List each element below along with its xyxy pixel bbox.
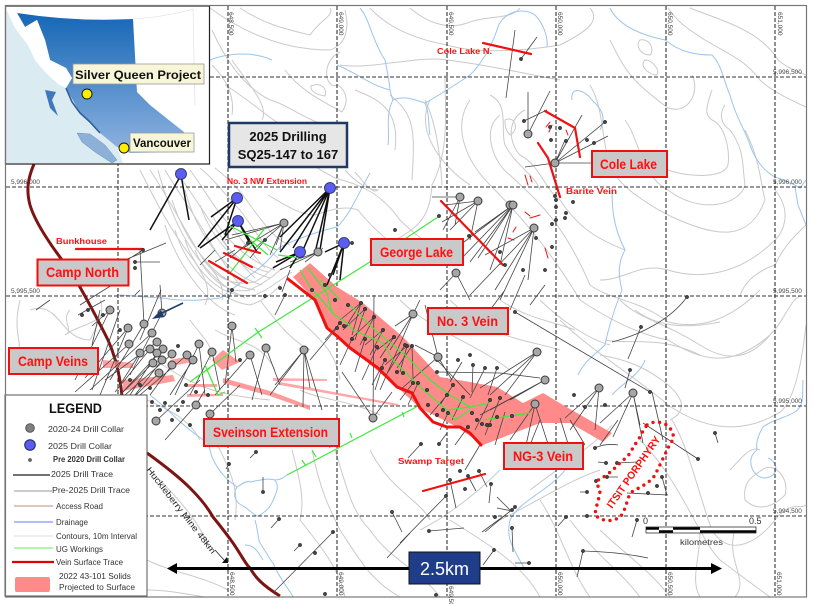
access road <box>28 164 280 596</box>
grid coordinate labels: 650,000 <box>556 572 563 596</box>
small red labels: Cole Lake N. <box>437 46 492 56</box>
label: george lake: George Lake <box>380 245 453 260</box>
scale bar: 0.5 <box>749 516 762 526</box>
small drill collars <box>80 57 717 597</box>
legend panel <box>5 395 147 596</box>
small red labels: Barite Vein <box>566 186 617 196</box>
label: no. 3 vein <box>428 308 508 334</box>
itsit porphyry outline <box>595 422 673 521</box>
huckleberry pointer <box>215 550 228 563</box>
label: ng-3 vein: NG-3 Vein <box>513 449 573 464</box>
inset label: silver queen project <box>73 64 204 84</box>
vein surface traces <box>76 43 580 491</box>
grid coordinate labels: 5,995,000 <box>773 398 802 405</box>
label: itsit porphyry: ITSIT PORPHYRY <box>605 434 663 511</box>
label: cole lake <box>592 151 667 177</box>
2.5km span arrow: 2.5km <box>420 559 469 579</box>
grid coordinate labels: 650,000 <box>556 12 563 36</box>
2025 drill collars <box>176 168 350 258</box>
grid coordinate labels: 651,000 <box>775 572 782 596</box>
grid coordinate labels: 650,500 <box>666 12 673 36</box>
2020-24 drill collars <box>106 130 637 425</box>
grid coordinate labels: 649,500 <box>447 12 454 36</box>
scale bar: kilometres <box>680 538 723 547</box>
grid coordinate labels: 5,994,500 <box>773 508 802 515</box>
grid coordinate labels: 5,995,500 <box>773 288 802 295</box>
small red labels <box>56 46 617 466</box>
inset label: silver queen project: Silver Queen Project <box>75 68 201 82</box>
grid coordinate labels: 649,000 <box>337 12 344 36</box>
grid coordinate labels: 651,000 <box>776 12 783 36</box>
callout: 2025 drilling: SQ25-147 to 167 <box>238 147 338 162</box>
callout: 2025 drilling: 2025 Drilling <box>249 129 327 144</box>
label: camp north <box>38 260 128 286</box>
callout: 2025 drilling <box>229 123 347 167</box>
grid coordinate labels: 5,996,000 <box>11 179 40 186</box>
legend panel: UG Workings <box>56 545 103 554</box>
grid coordinate labels: 5,996,500 <box>773 69 802 76</box>
legend panel: Projected to Surface <box>59 583 136 592</box>
grid coordinate labels: 5,996,000 <box>773 179 802 186</box>
label: sveinson extension: Sveinson Extension <box>213 425 328 440</box>
legend panel: 2022 43-101 Solids <box>59 572 131 581</box>
legend panel: 2025 Drill Trace <box>51 470 114 479</box>
inset label: vancouver: Vancouver <box>133 138 192 150</box>
label: ng-3 vein <box>504 443 583 469</box>
2025 drill traces <box>150 175 344 285</box>
legend panel: Vein Surface Trace <box>56 558 124 567</box>
camp arrow <box>152 303 183 319</box>
label: camp veins: Camp Veins <box>18 354 88 369</box>
small red labels: Bunkhouse <box>56 236 107 246</box>
grid coordinate labels: 5,995,500 <box>11 288 40 295</box>
legend panel: Pre-2025 Drill Trace <box>52 486 131 495</box>
legend panel: Drainage <box>56 518 89 527</box>
legend panel: Contours, 10m Interval <box>56 532 137 541</box>
small red labels: Swamp Target <box>398 456 464 466</box>
label: sveinson extension <box>204 419 339 446</box>
label: cole lake: Cole Lake <box>600 157 657 172</box>
label: camp north: Camp North <box>46 265 119 280</box>
solids projected to surface <box>103 263 612 445</box>
legend panel: 2025 Drill Collar <box>48 442 112 451</box>
legend panel: Access Road <box>56 502 103 511</box>
grid coordinate labels: 648,500 <box>228 572 235 596</box>
huckleberry mine label: Huckleberry Mine 48km <box>144 465 218 556</box>
pre-2025 drill traces <box>36 30 718 593</box>
label: george lake <box>371 239 463 265</box>
scale bar: 0 <box>643 516 648 526</box>
small red labels: No. 3 NW Extension <box>227 176 307 186</box>
location inset map <box>6 6 210 164</box>
inset label: vancouver <box>130 133 194 152</box>
label: camp veins <box>9 348 98 374</box>
legend panel: Pre 2020 Drill Collar <box>53 455 125 464</box>
grid coordinate labels: 648,500 <box>227 12 234 36</box>
legend panel: LEGEND <box>49 401 102 416</box>
grid coordinate labels: 649,000 <box>337 572 344 596</box>
2.5km span arrow <box>167 552 722 584</box>
grid coordinate labels: 650,500 <box>666 572 673 596</box>
label: no. 3 vein: No. 3 Vein <box>437 314 498 329</box>
legend panel: 2020-24 Drill Collar <box>48 425 124 434</box>
underground workings <box>190 217 530 475</box>
scale bar <box>643 516 762 547</box>
